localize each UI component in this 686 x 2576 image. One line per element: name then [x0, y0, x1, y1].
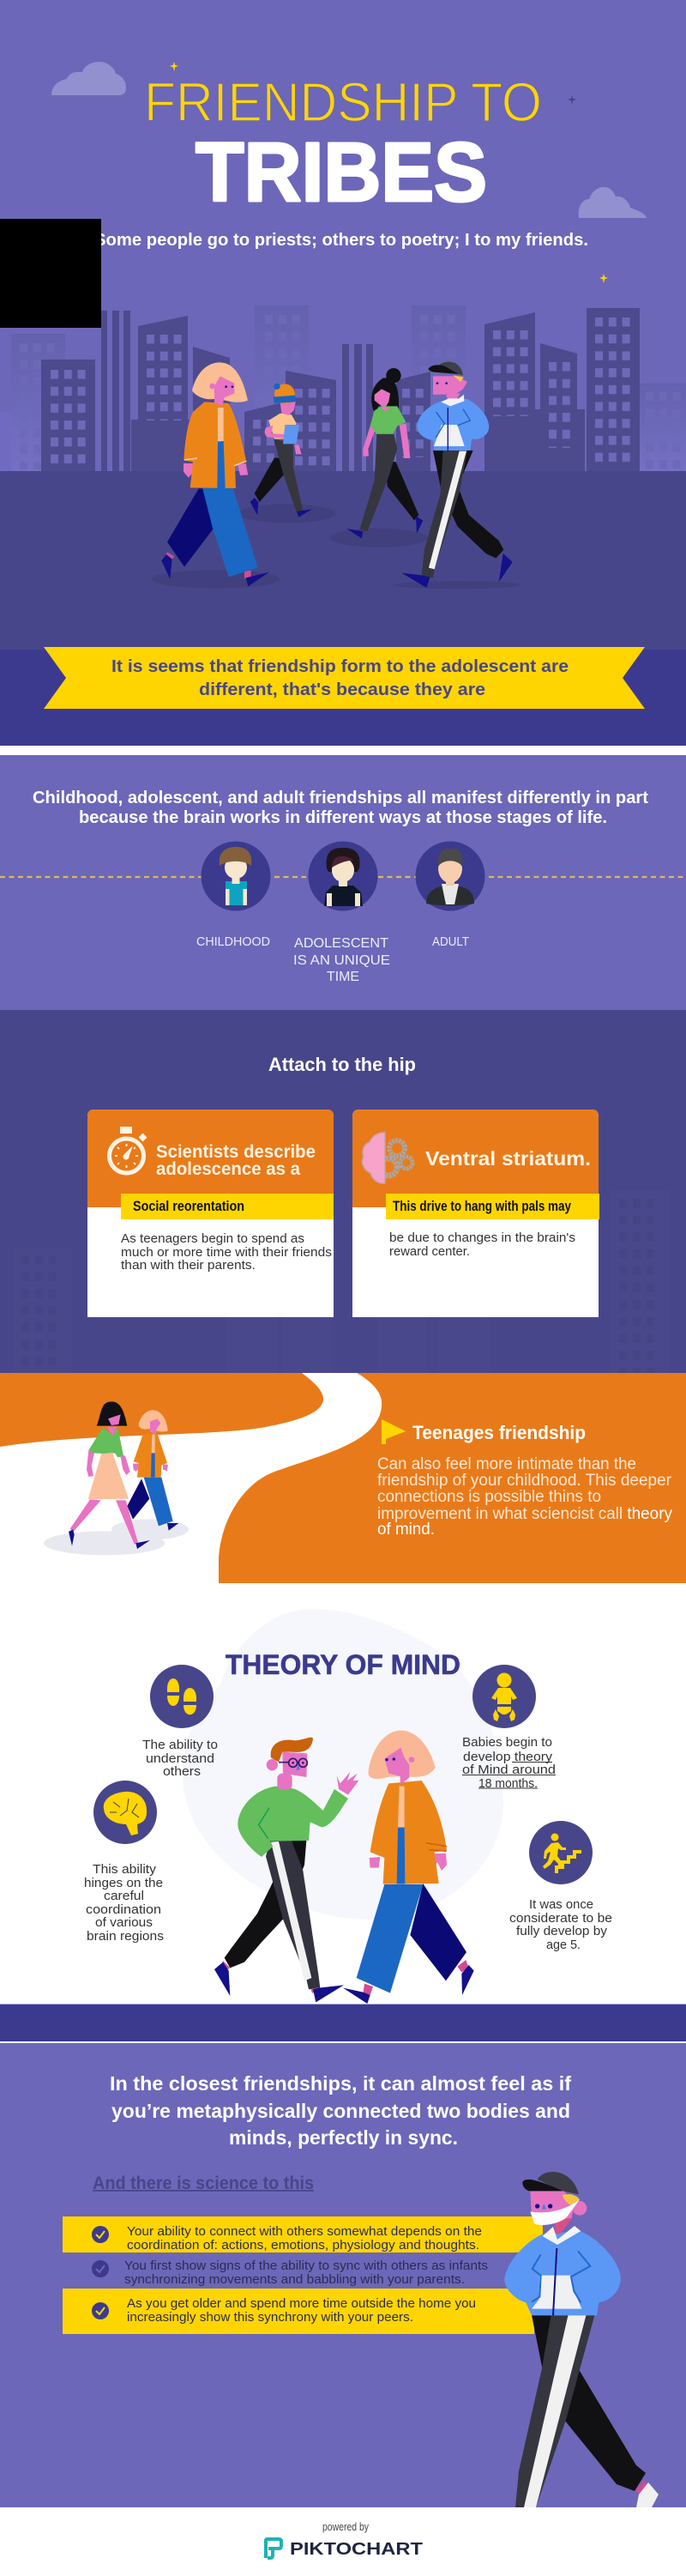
icon: brain and gears	[362, 1133, 412, 1183]
text: babies: Babies begin to	[462, 1735, 552, 1750]
footer: powered by piktochart: powered by	[322, 2520, 369, 2533]
boy	[214, 1738, 358, 2002]
card: ventral striatum: Ventral striatum.	[425, 1147, 591, 1170]
intro text: because the brain works in different ways at those stages of life.	[79, 807, 607, 827]
card: social reorientation: much or more time with their friends	[121, 1245, 332, 1260]
heading: you’re metaphysically connected two bodies and	[111, 2100, 570, 2122]
labels: CHILDHOOD	[196, 934, 270, 949]
body text: Can also feel more intimate than the	[377, 1455, 636, 1473]
subtitle: Some people go to priests; others to poetry; I to my friends.	[94, 231, 588, 250]
star 3	[599, 274, 608, 283]
body text: connections is possible thins to	[377, 1488, 601, 1506]
kid	[250, 384, 312, 517]
text: this ability: of various	[95, 1915, 153, 1930]
text: babies: 18 months.	[478, 1776, 538, 1791]
intro text	[33, 788, 648, 827]
woman with orange coat	[161, 362, 269, 586]
body text	[377, 1455, 672, 1539]
panel: teenages friendship	[0, 1373, 686, 1583]
text: it was once: considerate to be	[509, 1911, 612, 1926]
body text: friendship of your childhood. This deeper	[377, 1472, 672, 1490]
panel: attach to the hip	[0, 1010, 686, 1373]
text: this ability: coordination	[86, 1902, 161, 1917]
panel: life stages	[0, 755, 686, 1010]
illustration: man in mask	[504, 2172, 659, 2507]
text: it was once: age 5.	[546, 1938, 581, 1952]
text: it was once: It was once	[529, 1897, 593, 1912]
list item 1	[63, 2216, 543, 2252]
illustration: two women walking	[44, 1401, 189, 1555]
card: social reorientation: adolescence as a	[156, 1159, 300, 1179]
band	[0, 2005, 686, 2041]
text: ability to understand: The ability to	[142, 1738, 218, 1752]
text: ability to understand: understand	[146, 1751, 214, 1766]
card: social reorientation: than with their parents.	[121, 1258, 256, 1273]
list item 3: As you get older and spend more time outside the home you	[127, 2296, 476, 2311]
card: social reorientation	[87, 1110, 334, 1317]
card: social reorientation: Scientists describe	[156, 1142, 316, 1162]
illustration: four friends walking	[152, 362, 521, 589]
text: it was once	[509, 1897, 612, 1952]
panel: synchrony	[0, 2043, 686, 2507]
labels: ADULT	[432, 934, 469, 949]
shadows	[152, 504, 521, 589]
star 1	[170, 62, 178, 71]
list item 1: coordination of: actions, emotions, physiology and thoughts.	[127, 2238, 479, 2252]
list item 3: increasingly show this synchrony with your peers.	[127, 2310, 413, 2325]
labels	[196, 934, 469, 984]
card: social reorientation: As teenagers begin to spend as	[121, 1231, 304, 1246]
icon: stopwatch	[110, 1127, 147, 1173]
card: ventral striatum: reward center.	[389, 1244, 470, 1259]
star 2	[568, 95, 576, 105]
footer: powered by piktochart: PIKTOCHART	[290, 2539, 424, 2559]
panel: hero background	[0, 0, 686, 650]
subheading: And there is science to this	[93, 2174, 314, 2193]
text: this ability: This ability	[93, 1862, 157, 1877]
heading: minds, perfectly in sync.	[229, 2126, 458, 2149]
illustration: two friends talking	[214, 1731, 474, 2004]
ribbon banner: It is seems that friendship form to the adolescent are	[111, 657, 569, 676]
icon: baby	[472, 1665, 536, 1728]
heading: Attach to the hip	[268, 1054, 416, 1075]
icon: stairs runner	[529, 1821, 593, 1884]
girl	[343, 1731, 474, 2004]
title: friendship to: FRIENDSHIP TO	[144, 71, 542, 133]
city skyline	[0, 305, 686, 471]
black redaction box	[0, 219, 101, 328]
icon: piktochart logo	[266, 2539, 281, 2558]
labels: TIME	[327, 970, 359, 984]
icon: adult	[415, 841, 485, 911]
woman with bun	[346, 368, 423, 538]
icon: brain	[93, 1781, 157, 1844]
body text: of mind.	[377, 1521, 435, 1539]
text: this ability: brain regions	[87, 1929, 164, 1944]
text: this ability: hinges on the	[84, 1876, 163, 1890]
ground	[0, 471, 686, 650]
list item 3	[63, 2289, 534, 2334]
man in cap	[401, 362, 513, 588]
text: babies: of Mind around	[462, 1763, 556, 1777]
card: social reorientation: Social reorentation	[133, 1199, 244, 1214]
cloud right	[579, 187, 647, 218]
labels: IS AN UNIQUE	[293, 953, 390, 968]
title: tribes: TRIBES	[196, 125, 487, 219]
icon: child	[201, 841, 271, 911]
band	[0, 650, 686, 746]
heading: THEORY OF MIND	[226, 1649, 460, 1680]
card: ventral striatum: be due to changes in the brain's	[389, 1231, 575, 1245]
heading: In the closest friendships, it can almost feel as if	[110, 2072, 571, 2095]
list item 1: Your ability to connect with others somewhat depends on the	[127, 2224, 482, 2239]
footer: powered by piktochart	[0, 2507, 686, 2576]
labels: ADOLESCENT	[294, 936, 388, 951]
list item 2: synchronizing movements and babbling with your parents.	[124, 2272, 465, 2287]
text: ability to understand: others	[163, 1764, 201, 1779]
text: ability to understand	[142, 1738, 218, 1779]
body text: improvement in what sciencist call theory	[377, 1505, 672, 1523]
text: this ability	[84, 1862, 164, 1944]
ribbon banner	[44, 647, 645, 709]
icon: adolescent	[309, 841, 377, 911]
card: ventral striatum	[352, 1110, 599, 1317]
legs	[532, 2315, 646, 2491]
text: this ability: careful	[104, 1889, 144, 1903]
text: it was once: fully develop by	[516, 1924, 608, 1938]
icon: flag	[382, 1419, 406, 1444]
icon: footprints	[150, 1665, 214, 1728]
cloud left	[51, 62, 126, 95]
panel: theory of mind	[0, 1583, 686, 2005]
ribbon banner: different, that's because they are	[199, 680, 485, 699]
list item 2	[92, 2259, 488, 2287]
card: ventral striatum: This drive to hang with pals may	[393, 1199, 572, 1214]
intro text: Childhood, adolescent, and adult friendships all manifest differently in part	[33, 788, 648, 807]
text: babies: develop theory	[463, 1750, 553, 1764]
text: babies	[462, 1735, 556, 1791]
heading: Teenages friendship	[412, 1422, 586, 1443]
heading	[110, 2072, 571, 2149]
list item 2: You first show signs of the ability to sync with others as infants	[124, 2259, 488, 2273]
